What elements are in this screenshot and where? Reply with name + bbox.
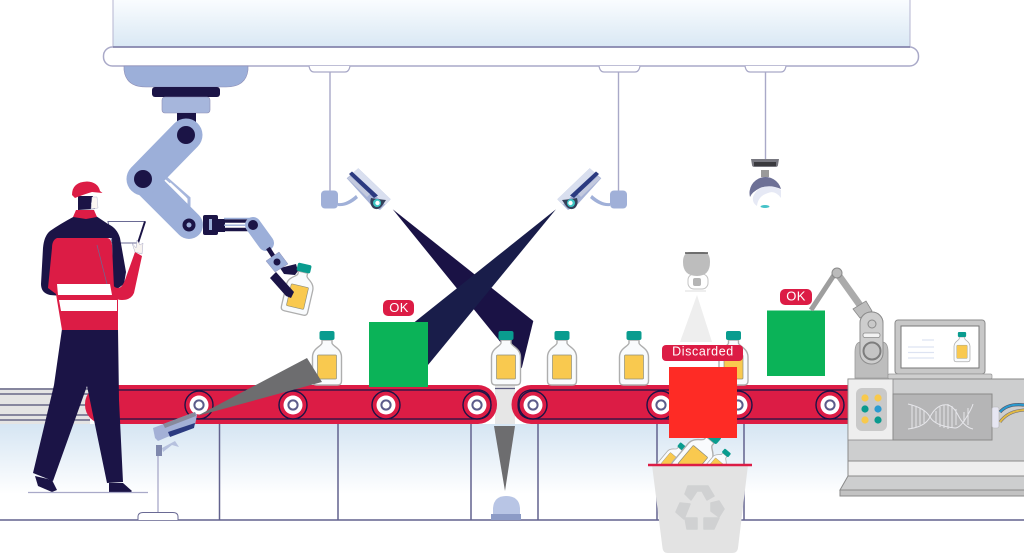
Discarded tag: Discarded	[672, 344, 734, 358]
neck and hair	[78, 196, 95, 210]
tablet	[108, 222, 145, 243]
dome camera hanging	[749, 72, 782, 209]
recycling bin	[648, 465, 752, 553]
camera left hanging	[321, 72, 391, 210]
collar	[73, 210, 97, 219]
floor gradient	[0, 424, 850, 494]
OK tag 2	[780, 288, 812, 305]
hard hat	[72, 182, 102, 198]
recycle symbol	[676, 486, 724, 529]
ceiling rail	[104, 47, 918, 66]
jacket red body	[48, 238, 118, 330]
bottom sensor	[491, 496, 521, 520]
ceiling robot arm	[124, 66, 298, 275]
screen text lines	[908, 340, 934, 358]
green OK box 2	[767, 310, 825, 376]
light beam: right camera	[410, 209, 556, 365]
shoes	[35, 476, 132, 493]
conveyor belt right	[512, 385, 860, 424]
hand	[132, 240, 143, 254]
green OK box 1	[369, 322, 428, 387]
tablet edge	[138, 222, 145, 243]
ceiling window	[113, 0, 910, 47]
DNA panel	[893, 394, 992, 440]
reflective stripes	[57, 284, 117, 311]
OK tag 1: OK	[389, 300, 409, 315]
Discarded tag	[662, 344, 743, 361]
ceiling mounts	[309, 66, 786, 72]
camera right hanging	[557, 72, 627, 210]
conveyor belt left	[85, 385, 497, 424]
analyser machine	[840, 379, 1024, 496]
OK tag 2: OK	[786, 288, 806, 304]
screen bottle	[954, 332, 970, 362]
seam	[97, 245, 108, 288]
OK tag 1	[383, 300, 414, 316]
jacket shoulders and sleeves	[41, 216, 126, 296]
gripper finger over bottle	[270, 272, 294, 298]
left stand camera	[138, 412, 197, 520]
left camera scan beam	[197, 358, 322, 416]
bottom sensor beam	[494, 426, 515, 491]
gripped bottle	[281, 261, 318, 316]
control panel	[848, 379, 893, 440]
worker	[28, 182, 148, 493]
red discarded box	[669, 367, 737, 438]
bottles falling into bin	[657, 424, 734, 484]
jacket forearm	[109, 252, 142, 300]
floor line and conveyor legs	[0, 424, 1024, 520]
spray camera	[680, 252, 712, 342]
light beam: left camera	[393, 209, 533, 368]
laptop	[888, 320, 992, 379]
cables	[1000, 405, 1024, 422]
conveyor feed rails	[0, 385, 515, 424]
trousers	[33, 329, 123, 483]
ground line	[28, 492, 148, 494]
bottles on conveyor	[312, 331, 748, 385]
packing robot arm	[811, 268, 888, 378]
connector	[992, 407, 999, 428]
